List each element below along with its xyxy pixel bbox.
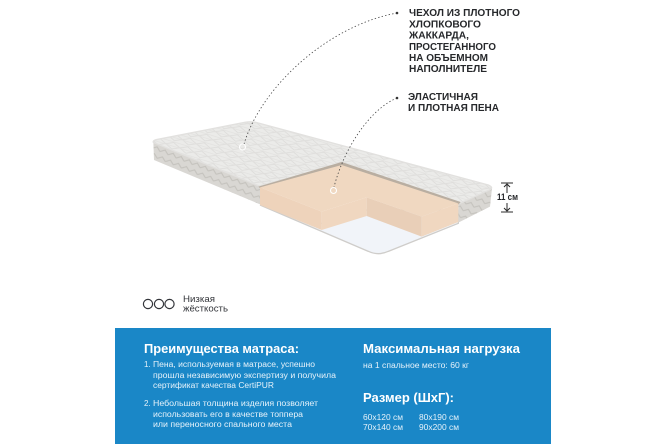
callout marker: foam [330, 188, 336, 194]
mattress quilted top [153, 122, 492, 203]
list: advantages: прошла независимую экспертизу и получила [153, 371, 337, 380]
heading: maximum load: Максимальная нагрузка [363, 341, 521, 356]
list: sizes: 60x120 см [363, 413, 403, 422]
callout text: cover: НАПОЛНИТЕЛЕ [409, 64, 487, 75]
mattress right side [458, 188, 492, 223]
foam front face inner left [322, 197, 367, 230]
list: sizes [363, 413, 459, 432]
illustration: mattress cutaway [153, 122, 492, 254]
callout dot: cover [396, 12, 398, 14]
list: advantages: сертификат качества CertiPUR [153, 381, 274, 390]
foam cut edge [258, 162, 461, 205]
callout line: foam [334, 98, 397, 187]
text: load value: на 1 спальное место: 60 кг [363, 361, 469, 370]
callout line: cover [244, 13, 397, 144]
foam top face [260, 165, 458, 217]
mattress bottom cover [260, 205, 458, 254]
list: advantages [144, 360, 337, 429]
list: sizes: 80x190 см [419, 413, 459, 422]
panel: information [115, 328, 551, 444]
list: advantages: или переносного спального места [153, 420, 293, 429]
list: sizes: 70x140 см [363, 423, 403, 432]
hardness indicator [143, 294, 228, 314]
callout text: foam: ЭЛАСТИЧНАЯ [408, 92, 478, 103]
foam front face right [422, 203, 458, 237]
list: advantages: Небольшая толщина изделия позволяет [153, 399, 318, 408]
callout text: cover: ПРОСТЕГАННОГО [409, 42, 496, 53]
callout text: cover: НА ОБЪЕМНОМ [409, 53, 488, 64]
callout dot: foam [396, 97, 398, 99]
heading: advantages: Преимущества матраса: [144, 341, 299, 356]
callout text: cover: ЧЕХОЛ ИЗ ПЛОТНОГО [409, 8, 520, 19]
callout text: cover: ХЛОПКОВОГО [409, 20, 481, 30]
hardness label [183, 294, 228, 314]
dimension: mattress height: 11 см [497, 192, 518, 202]
hardness label: Низкая [183, 294, 215, 305]
list: advantages: 2. [144, 399, 151, 408]
hardness icon: three circles [143, 299, 174, 309]
dimension: mattress height [497, 183, 518, 212]
mattress left side [153, 142, 260, 204]
list: advantages: 1. [144, 360, 151, 369]
callout marker: cover [240, 144, 246, 150]
callout text: cover: ЖАККАРДА, [408, 30, 469, 42]
panel background [115, 328, 551, 444]
foam front face left [260, 187, 322, 230]
hardness label: жёсткость [183, 304, 228, 314]
callout text: cover [408, 8, 520, 75]
callout text: foam [408, 92, 499, 114]
list: advantages: использовать его в качестве топпера [153, 410, 304, 419]
list: advantages: Пена, используемая в матрасе, успешно [153, 360, 316, 369]
callout text: foam: И ПЛОТНАЯ ПЕНА [408, 103, 499, 114]
heading: size: Размер (ШхГ): [363, 390, 454, 405]
list: sizes: 90x200 см [419, 423, 459, 432]
foam front face inner right [367, 197, 422, 237]
